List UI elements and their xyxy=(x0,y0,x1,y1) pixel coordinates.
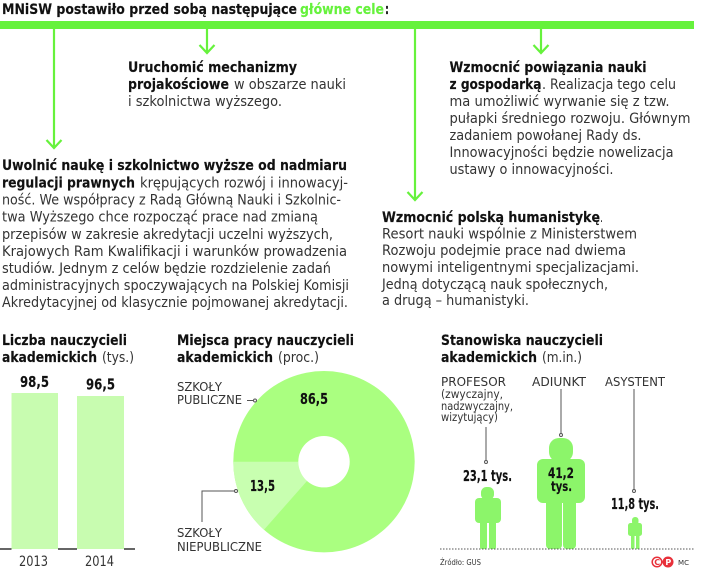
text block: Wzmocnić powiązania nauki: . Realizacja tego celu xyxy=(542,77,676,93)
text block: Wzmocnić polską humanistykę: Wzmocnić polską humanistykę xyxy=(382,210,600,226)
pictogram chart: positions: ASYSTENT xyxy=(605,374,665,389)
text block: Wzmocnić powiązania nauki: Wzmocnić powiązania nauki xyxy=(450,60,646,76)
bar chart: number of teachers: 2013 xyxy=(19,554,48,570)
heading: Stanowiska: Stanowiska nauczycieli xyxy=(441,333,603,349)
text block: Wzmocnić polską humanistykę xyxy=(381,210,639,309)
heading: Stanowiska: (m.in.) xyxy=(542,350,582,366)
text block: Uruchomić mechanizmy: projakościowe xyxy=(128,77,229,93)
logo: CP xyxy=(652,556,674,568)
pictogram chart: positions: 23,1 tys. xyxy=(463,467,512,485)
heading: Liczba nauczycieli: (tys.) xyxy=(102,350,134,366)
text block: Uwolnić naukę: krępujących rozwój i innowacyj- xyxy=(140,175,348,191)
text block: Wzmocnić powiązania nauki xyxy=(450,60,690,178)
donut chart: workplaces: SZKOŁY xyxy=(177,379,222,394)
text block: Uwolnić naukę: studiów. Jednym z celów będzie rozdzielenie zadań xyxy=(2,261,331,277)
heading: Miejsca pracy xyxy=(177,333,354,366)
arrow: goal 4 xyxy=(534,29,548,53)
title: główne cele xyxy=(300,2,384,18)
arrow: goal 2 xyxy=(200,29,214,53)
text block: Wzmocnić powiązania nauki: zadaniem powołanej Rady ds. xyxy=(450,128,642,144)
arrow: goal 3 xyxy=(408,29,422,200)
donut chart: workplaces: PUBLICZNE xyxy=(177,392,242,407)
text block: Wzmocnić polską humanistykę: Resort nauki wspólnie z Ministerstwem xyxy=(382,226,637,242)
text block: Wzmocnić powiązania nauki: ustawy o innowacyjności. xyxy=(450,162,614,178)
text block: Uwolnić naukę: regulacji prawnych xyxy=(2,175,135,191)
text block: Uruchomić mechanizmy xyxy=(128,60,346,110)
author initials: MC xyxy=(678,559,689,567)
text block: Wzmocnić polską humanistykę: Jedną dotyczącą nauk społecznych, xyxy=(381,277,608,293)
figure: asystent xyxy=(628,517,642,549)
donut chart: workplaces: 13,5 xyxy=(250,477,275,495)
pictogram chart: positions xyxy=(440,374,695,549)
figure: profesor xyxy=(475,487,501,549)
text block: Uwolnić naukę xyxy=(2,158,349,311)
heading: Stanowiska xyxy=(441,333,603,366)
pictogram chart: positions: nadzwyczajny, xyxy=(441,399,513,413)
bar chart: number of teachers: 2014 xyxy=(85,554,114,570)
pictogram chart: positions: tys. xyxy=(551,480,572,495)
text block: Wzmocnić powiązania nauki: z gospodarką xyxy=(450,77,542,93)
source note: Źródło: GUS xyxy=(440,556,481,567)
bar chart: number of teachers: 96,5 xyxy=(86,376,115,394)
arrow: goal 1 xyxy=(46,29,62,148)
text block: Uwolnić naukę: ność. We współpracy z Radą Główną Nauki i Szkolnic- xyxy=(2,192,341,208)
text block: Uwolnić naukę: Akredytacyjnej od klasycznie pojmowanej akredytacji. xyxy=(2,295,348,311)
heading: Miejsca pracy: akademickich xyxy=(177,350,273,366)
text block: Wzmocnić powiązania nauki: Innowacyjności będzie nowelizacja xyxy=(450,145,674,161)
pictogram chart: positions: (zwyczajny, xyxy=(441,387,503,401)
logo: CP: P xyxy=(665,558,671,567)
heading: Liczba nauczycieli: Liczba nauczycieli xyxy=(2,333,127,349)
donut chart: workplaces: SZKOŁY xyxy=(177,525,222,540)
text block: Wzmocnić polską humanistykę: nowymi inteligentnymi specjalizacjami. xyxy=(382,260,639,276)
text block: Wzmocnić powiązania nauki: pułapki średniego rozwoju. Głównym xyxy=(450,111,690,127)
donut chart: workplaces: NIEPUBLICZNE xyxy=(177,539,262,554)
text block: Wzmocnić powiązania nauki: ma umożliwić wyrwanie się z tzw. xyxy=(450,94,670,110)
donut chart: workplaces xyxy=(177,371,415,554)
bar chart: number of teachers: 98,5 xyxy=(20,373,49,391)
text block: Uwolnić naukę: twa Wyższego chce rozpocząć prace nad zmianą xyxy=(2,210,318,226)
pictogram chart: positions: 41,2 xyxy=(548,466,574,482)
text block: Uruchomić mechanizmy: w obszarze nauki xyxy=(234,77,346,93)
text block: Uruchomić mechanizmy: Uruchomić mechanizmy xyxy=(128,60,297,76)
heading: Miejsca pracy: Miejsca pracy nauczycieli xyxy=(177,333,354,349)
heading: Liczba nauczycieli xyxy=(2,333,134,366)
text block: Uruchomić mechanizmy: i szkolnictwa wyższego. xyxy=(128,94,282,110)
heading: Liczba nauczycieli: akademickich xyxy=(2,350,97,366)
heading: Stanowiska: akademickich xyxy=(441,350,537,366)
text block: Uwolnić naukę: przepisów w zakresie akredytacji uczelni wyższych, xyxy=(2,227,333,243)
logo: CP: C xyxy=(654,558,660,567)
pictogram chart: positions: wizytujący) xyxy=(441,410,498,424)
donut chart: workplaces: 86,5 xyxy=(300,390,328,408)
pictogram chart: positions: ADIUNKT xyxy=(532,374,586,389)
pictogram chart: positions: PROFESOR xyxy=(441,374,506,389)
title: : xyxy=(385,2,389,18)
text block: Wzmocnić polską humanistykę: Rozwoju podejmie prace nad dwiema xyxy=(382,243,626,259)
bar chart: number of teachers xyxy=(0,373,135,570)
heading: Miejsca pracy: (proc.) xyxy=(278,350,319,366)
title: MNiSW postawiło przed sobą następujące xyxy=(2,2,297,18)
text block: Uwolnić naukę: Krajowych Ram Kwalifikacji i warunków prowadzenia xyxy=(2,244,347,260)
text block: Uwolnić naukę: Uwolnić naukę i szkolnictwo wyższe od nadmiaru xyxy=(2,158,347,174)
pictogram chart: positions: 11,8 tys. xyxy=(611,495,659,513)
text block: Wzmocnić polską humanistykę: . xyxy=(600,210,603,226)
green header bar xyxy=(0,21,694,29)
figure: adiunkt xyxy=(537,438,585,549)
text block: Wzmocnić polską humanistykę: a drugą – humanistyki. xyxy=(382,293,529,309)
text block: Uwolnić naukę: administracyjnych spoczywających na Polskiej Komisji xyxy=(2,278,349,294)
